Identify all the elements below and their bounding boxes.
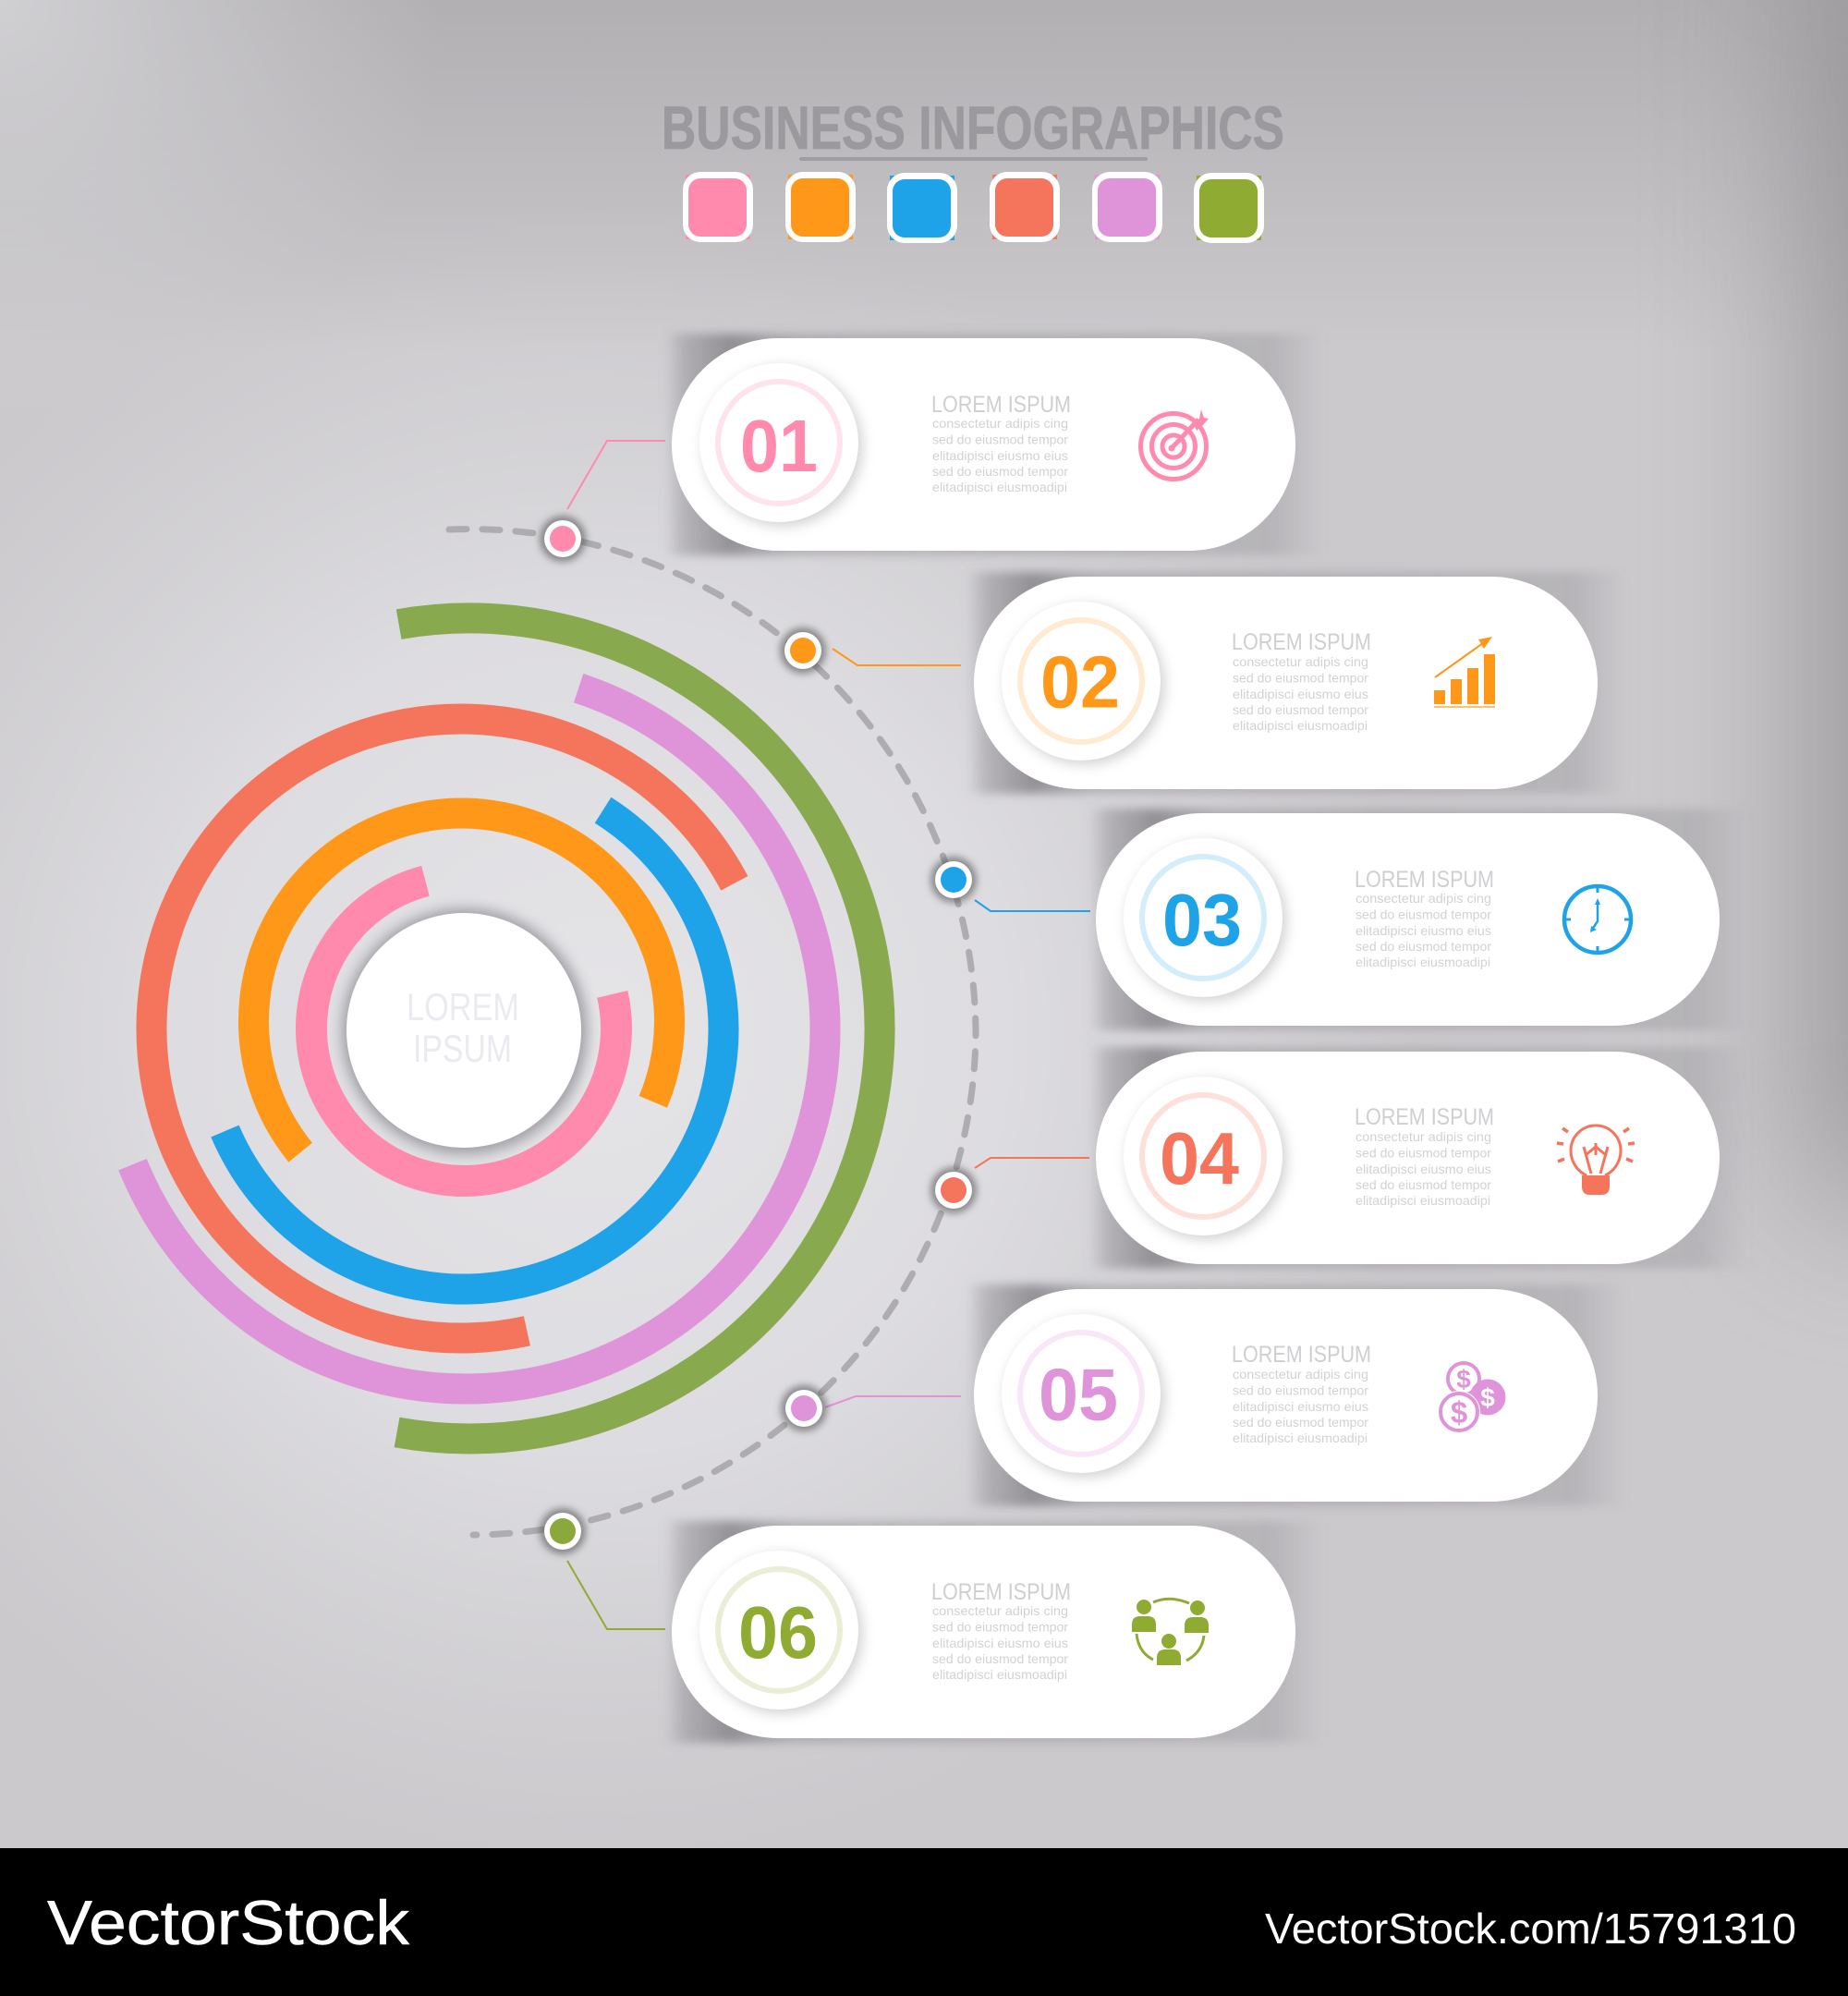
text block 06: elitadipisci eiusmoadipi <box>932 1667 1067 1682</box>
text block 05: elitadipisci eiusmoadipi <box>1233 1430 1368 1445</box>
footer logo: VectorStock <box>47 1888 410 1958</box>
panel: step 03 <box>1088 809 1749 1030</box>
icon: dollar coins: $ <box>1456 1365 1471 1394</box>
icon: dollar coins <box>1438 1363 1506 1433</box>
text block 06: elitadipisci eiusmo eius <box>932 1636 1068 1650</box>
icon: light bulb <box>1557 1126 1635 1195</box>
panel: step 02 <box>967 572 1627 794</box>
number 06: 06 <box>738 1591 818 1673</box>
text block 02: elitadipisci eiusmoadipi <box>1233 718 1368 733</box>
text block 02 <box>1232 629 1371 733</box>
node 01 <box>540 516 586 562</box>
text block 02: LOREM ISPUM <box>1232 629 1371 655</box>
node 02 <box>780 627 826 674</box>
panel: step 04 <box>1088 1047 1749 1269</box>
text block 05: LOREM ISPUM <box>1232 1342 1371 1368</box>
connector 06 <box>567 1561 665 1629</box>
text block 01: LOREM ISPUM <box>931 392 1071 418</box>
dashed arc <box>449 529 976 1535</box>
orange ring arc <box>169 728 754 1314</box>
text block 06: consectetur adipis cing <box>932 1603 1068 1618</box>
icon: target <box>1140 409 1209 479</box>
text block 03: elitadipisci eiusmo eius <box>1356 923 1491 938</box>
icon: dollar coins: $ <box>1480 1383 1495 1412</box>
number 02: 02 <box>1040 641 1120 723</box>
footer bar <box>0 1848 1848 1996</box>
title: BUSINESS INFOGRAPHICS <box>662 93 1284 162</box>
panel: step 01 <box>664 334 1325 555</box>
number 01: 01 <box>740 405 818 487</box>
pink ring arc <box>281 846 647 1211</box>
text block 03: sed do eiusmod tempor <box>1356 907 1491 922</box>
centre label <box>407 985 519 1070</box>
text block 06: sed do eiusmod tempor <box>932 1651 1068 1666</box>
text block 05: consectetur adipis cing <box>1233 1367 1368 1381</box>
panel: step 06 <box>664 1521 1325 1743</box>
text block 05 <box>1232 1342 1371 1445</box>
blue ring arc <box>105 671 822 1388</box>
text block 06: LOREM ISPUM <box>931 1579 1071 1605</box>
circular ring chart <box>0 554 944 1503</box>
centre label: IPSUM <box>413 1027 512 1070</box>
icon: clock <box>1564 886 1631 953</box>
text block 05: sed do eiusmod tempor <box>1233 1382 1368 1397</box>
text block 03: LOREM ISPUM <box>1355 867 1494 893</box>
text block 04: sed do eiusmod tempor <box>1356 1177 1491 1192</box>
green ring arc <box>0 554 944 1503</box>
text block 04 <box>1355 1104 1494 1208</box>
number 04: 04 <box>1160 1117 1239 1199</box>
colour swatches <box>683 172 1264 243</box>
text block 01 <box>931 392 1071 494</box>
text block 06 <box>931 1579 1071 1682</box>
text block 03 <box>1355 867 1494 969</box>
title underline <box>799 157 1148 161</box>
text block 05: sed do eiusmod tempor <box>1233 1415 1368 1430</box>
panel: step 05 <box>967 1284 1627 1506</box>
number 03: 03 <box>1162 879 1242 961</box>
centre circle <box>342 908 588 1154</box>
text block 01: elitadipisci eiusmoadipi <box>932 480 1067 494</box>
text block 03: elitadipisci eiusmoadipi <box>1356 955 1490 969</box>
number 05: 05 <box>1039 1353 1118 1436</box>
text block 01: sed do eiusmod tempor <box>932 464 1068 479</box>
text block 04: consectetur adipis cing <box>1356 1129 1491 1144</box>
text block 03: sed do eiusmod tempor <box>1356 939 1491 954</box>
node 04 <box>930 1167 977 1213</box>
connector 02 <box>833 649 961 665</box>
connector 05 <box>825 1396 961 1407</box>
node 03 <box>930 857 977 903</box>
footer url: VectorStock.com/15791310 <box>1265 1905 1796 1953</box>
connector 03 <box>975 900 1090 911</box>
text block 02: consectetur adipis cing <box>1233 654 1368 669</box>
text block 03: consectetur adipis cing <box>1356 891 1491 906</box>
text block 02: sed do eiusmod tempor <box>1233 702 1368 717</box>
coral ring arc <box>92 660 830 1397</box>
node 06 <box>540 1508 586 1554</box>
purple ring arc <box>12 576 919 1483</box>
text block 04: elitadipisci eiusmoadipi <box>1356 1193 1490 1208</box>
node 05 <box>781 1385 827 1431</box>
text block 02: sed do eiusmod tempor <box>1233 671 1368 686</box>
text block 01: sed do eiusmod tempor <box>932 432 1068 447</box>
text block 04: elitadipisci eiusmo eius <box>1356 1162 1491 1176</box>
text block 01: consectetur adipis cing <box>932 416 1068 431</box>
connector 04 <box>975 1158 1089 1168</box>
text block 04: LOREM ISPUM <box>1355 1104 1494 1130</box>
icon: growth chart <box>1434 637 1495 708</box>
text block 04: sed do eiusmod tempor <box>1356 1146 1491 1161</box>
icon: people network <box>1132 1599 1209 1665</box>
connector 01 <box>567 441 665 509</box>
text block 01: elitadipisci eiusmo eius <box>932 448 1068 463</box>
text block 06: sed do eiusmod tempor <box>932 1619 1068 1634</box>
centre label: LOREM <box>407 985 519 1028</box>
text block 02: elitadipisci eiusmo eius <box>1233 687 1368 701</box>
icon: dollar coins: $ <box>1451 1395 1467 1430</box>
text block 05: elitadipisci eiusmo eius <box>1233 1399 1368 1414</box>
